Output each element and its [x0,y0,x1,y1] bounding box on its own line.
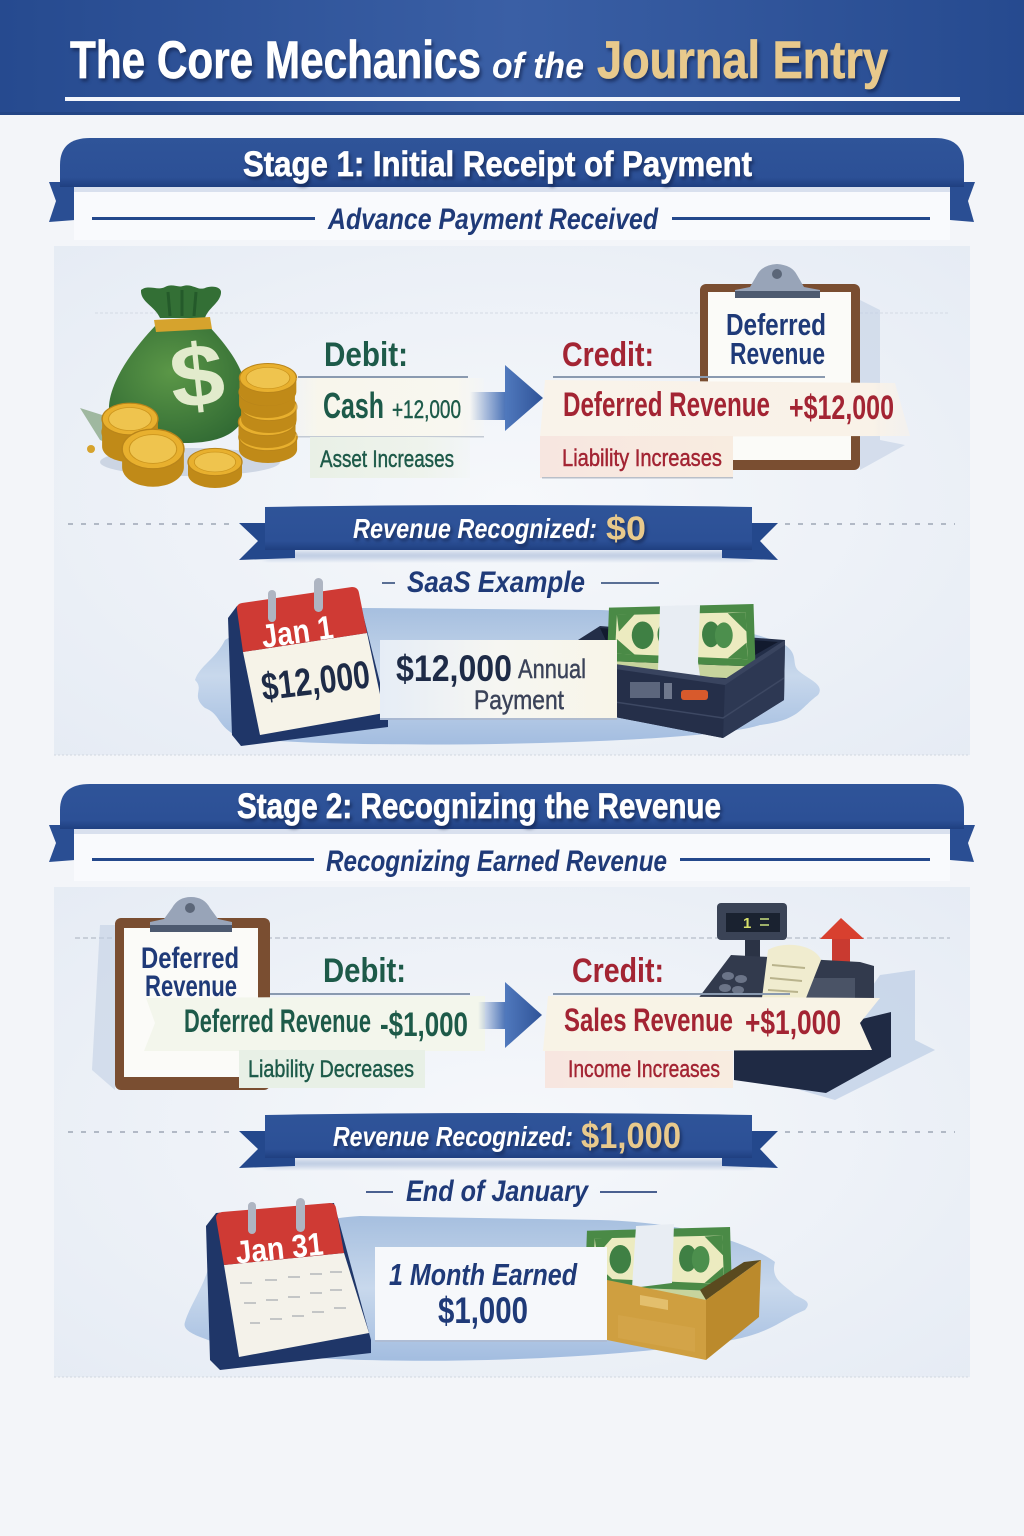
revenue recognized ribbon: $1,000: $1,000 [581,1115,681,1156]
stage 1 heading: Stage 1: Initial Receipt of Payment [243,145,752,184]
clipboard label: Deferred [141,942,239,975]
clipboard label: Revenue [145,970,237,1003]
icon: open box with bills [585,1224,761,1360]
credit entry: sales revenue: Sales Revenue [564,1002,733,1038]
icon: cash register with red arrow: 1 [743,915,751,932]
icon: jan 1 calendar [228,578,388,746]
stage 2 header ribbon [49,784,975,881]
end of january heading: End of January [406,1175,589,1208]
card: 1 month earned: 1 Month Earned [389,1257,578,1292]
header banner [0,0,1024,115]
debit entry: deferred revenue: Deferred Revenue [184,1003,371,1039]
arrow: debit to credit [478,982,542,1048]
icon: jan 1 calendar: Jan 1 [259,608,335,655]
card: $12,000 annual payment: Annual [518,654,586,684]
debit entry: deferred revenue: Debit: [323,952,406,990]
card: $12,000 annual payment: Payment [474,685,564,715]
revenue recognized ribbon: $1,000 [239,1113,778,1168]
debit entry: cash [296,336,484,478]
liability decreases tag: Liability Decreases [248,1056,414,1083]
clipboard label [141,942,239,1003]
title: of the [492,45,584,86]
clipboard label [726,307,826,371]
icon: jan 31 calendar [206,1198,371,1370]
icon: money bag and coins [80,285,297,488]
debit entry: cash: Cash [323,385,384,426]
liability increases tag [540,436,733,478]
income increases tag [545,1051,733,1088]
credit entry: sales revenue [543,952,880,1088]
subheading: advance payment received: Advance Payment Received [327,203,659,236]
title: Journal Entry [597,31,888,90]
icon: deferred revenue clipboard [700,264,905,470]
subheading: recognizing earned revenue [92,845,930,878]
saas scene backdrop [195,608,820,744]
subheading: recognizing earned revenue: Recognizing Earned Revenue [326,845,667,878]
credit entry: sales revenue: Credit: [572,952,664,990]
revenue recognized ribbon: $1,000: Revenue Recognized: [333,1121,573,1152]
debit entry: cash: Debit: [324,336,408,374]
title: The Core Mechanics [70,31,481,90]
liability decreases tag [239,1050,425,1088]
icon: money bag and coins: $ [165,323,229,428]
card: $12,000 annual payment [380,640,617,720]
revenue recognized ribbon: $0 [239,505,778,560]
clipboard label: Revenue [730,336,825,371]
revenue recognized ribbon: $0: $0 [606,510,646,548]
panel: stage 2 background [54,887,970,1377]
debit entry: deferred revenue: -$1,000 [380,1006,468,1044]
card: 1 month earned [375,1247,607,1342]
credit entry: deferred revenue: +$12,000 [789,389,894,427]
income increases tag: Income Increases [568,1056,720,1083]
icon: cash tray with bills [578,604,785,738]
asset increases tag: Asset Increases [320,446,454,473]
debit entry: deferred revenue [144,952,485,1088]
clipboard label: Deferred [726,307,826,342]
revenue recognized ribbon: $0: Revenue Recognized: [353,513,597,544]
icon: deferred revenue clipboard [92,897,270,1090]
liability increases tag: Liability Increases [562,445,722,472]
arrow: debit to credit [470,365,543,431]
card: 1 month earned: $1,000 [438,1290,528,1331]
credit entry: deferred revenue: Deferred Revenue [563,386,770,424]
asset increases tag [310,437,470,478]
title [70,31,888,90]
stage 2 heading: Stage 2: Recognizing the Revenue [237,787,721,826]
stage 1 header ribbon [49,138,975,240]
icon: jan 1 calendar: $12,000 [259,653,372,709]
credit entry: deferred revenue [540,336,910,478]
card: $12,000 annual payment: $12,000 [396,648,512,689]
credit entry: sales revenue: +$1,000 [745,1004,841,1042]
debit entry: cash: +12,000 [392,396,461,424]
panel: stage 1 background [54,246,970,755]
credit entry: deferred revenue: Credit: [562,336,654,374]
january scene backdrop [185,1216,808,1361]
saas example heading: SaaS Example [407,566,585,599]
icon: cash register with red arrow [697,903,935,1100]
subheading: advance payment received [92,203,930,236]
icon: jan 31 calendar: Jan 31 [234,1225,325,1270]
